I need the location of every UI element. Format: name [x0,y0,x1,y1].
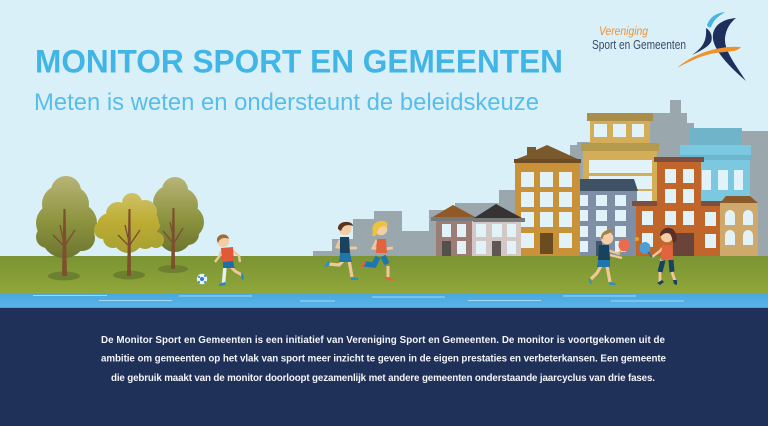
logo: Vereniging Sport en Gemeenten [592,12,746,81]
background skyline [313,100,768,260]
tree 1 [36,176,97,280]
building: blue-grey block [580,179,638,257]
intro paragraph [101,335,667,384]
tree 3 [151,177,204,273]
grass [0,256,768,293]
intro paragraph: die gebruik maakt van de monitor doorloopt gezamenlijk met andere gemeenten onderstaande jaarcyclus van drie fases. [111,373,655,384]
woman with tennis racket [640,228,677,285]
female runner [360,221,393,281]
building: tan house [720,196,758,257]
intro paragraph: De Monitor Sport en Gemeenten is een initiatief van Vereniging Sport en Gemeenten. De monitor is voortgekomen uit de [101,335,666,346]
subtitle: Meten is weten en ondersteunt de beleidskeuze [34,89,539,116]
small white house [472,204,525,258]
building: rust orange block [632,157,722,257]
title: MONITOR SPORT EN GEMEENTEN [35,44,563,80]
tree 2 [94,193,164,280]
building: light blue tower [680,128,752,205]
river [0,293,768,307]
navy footer panel [0,308,768,426]
logo: Vereniging Sport en Gemeenten: Sport en Gemeenten [592,38,686,52]
intro paragraph: ambitie om gemeenten op het vlak van sport meer inzicht te geven in de eigen prestaties en verbeterkansen. Een gemeente [101,354,667,364]
small brown house [431,205,477,258]
boy with tennis racket [589,229,639,285]
building: tall yellow tower [581,113,659,211]
logo: Vereniging Sport en Gemeenten: Vereniging [599,24,648,38]
building: ochre apartment block [514,145,581,257]
male runner [324,222,358,280]
boy with football [197,234,244,286]
